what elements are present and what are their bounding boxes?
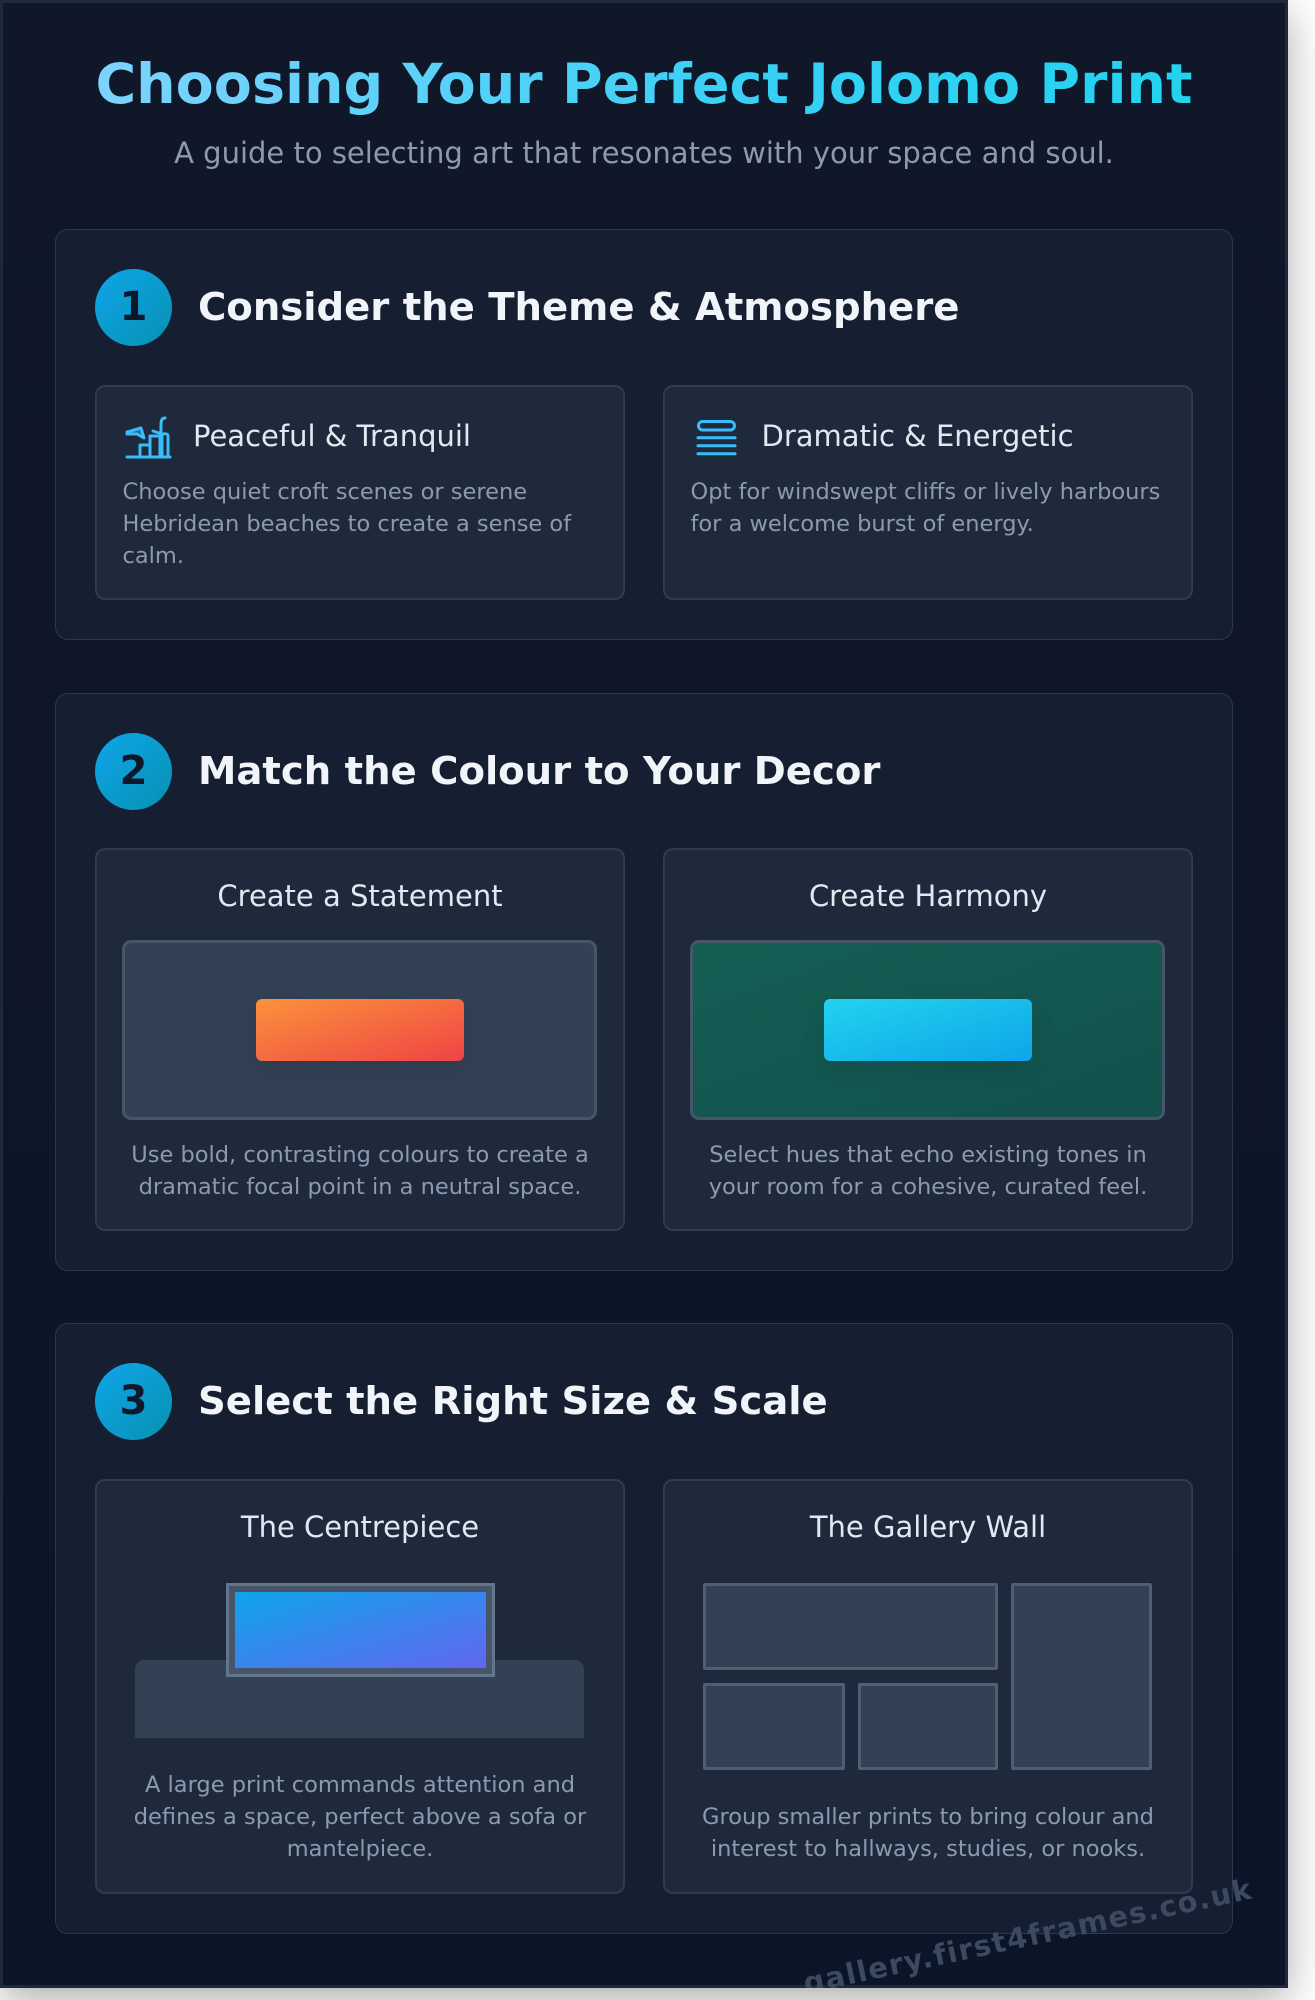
number badge 1: 1 (120, 284, 147, 330)
card: create a statement (95, 848, 625, 1231)
number badge 2 (95, 732, 172, 810)
card text: defines a space, perfect above a sofa or (134, 1804, 586, 1830)
panel: step 2 colour (55, 692, 1233, 1270)
illustration: neutral wall (122, 940, 597, 1120)
card text: mantelpiece. (287, 1836, 433, 1862)
card text: for a welcome burst of energy. (690, 511, 1034, 537)
panel: step 3 size (55, 1323, 1233, 1934)
card text (709, 1142, 1147, 1200)
card title: The Centrepiece (241, 1510, 479, 1544)
subtitle: A guide to selecting art that resonates with your space and soul. (174, 136, 1114, 170)
illustration: print above sofa (135, 1583, 584, 1738)
heading: step 1: Consider the Theme & Atmosphere (198, 285, 959, 330)
number badge 3 (95, 1363, 172, 1440)
card text: calm. (122, 543, 184, 569)
number badge 1 (95, 269, 172, 346)
card title: Dramatic & Energetic (762, 418, 1074, 452)
card text: interest to hallways, studies, or nooks. (711, 1836, 1145, 1862)
card text (690, 479, 1160, 537)
card: create harmony (663, 848, 1193, 1231)
card: dramatic and energetic (663, 385, 1193, 600)
panel: step 1 theme and atmosphere (55, 229, 1233, 640)
card text: your room for a cohesive, curated feel. (709, 1174, 1147, 1200)
card text: Opt for windswept cliffs or lively harbours (690, 479, 1160, 505)
heading: step 3: Select the Right Size & Scale (198, 1379, 828, 1424)
card: the centrepiece (95, 1479, 625, 1894)
illustration: gallery frames (703, 1583, 1152, 1770)
frame: wide (703, 1583, 998, 1670)
card text: Use bold, contrasting colours to create a (131, 1142, 589, 1168)
card text: Hebridean beaches to create a sense of (122, 511, 571, 537)
icon: croft buildings (126, 416, 172, 458)
card title: The Gallery Wall (810, 1510, 1046, 1544)
card text (122, 479, 572, 569)
framed print (226, 1583, 495, 1677)
card text: Choose quiet croft scenes or serene (122, 479, 527, 505)
card: the gallery wall (663, 1479, 1193, 1894)
card text: dramatic focal point in a neutral space. (139, 1174, 581, 1200)
card text: Select hues that echo existing tones in (709, 1142, 1147, 1168)
swatch: cyan print (824, 999, 1032, 1061)
frame: small left (703, 1683, 845, 1770)
card text (131, 1142, 589, 1200)
frame: small right (858, 1683, 998, 1770)
title: Choosing Your Perfect Jolomo Print (95, 52, 1193, 117)
number badge 2: 2 (120, 748, 147, 794)
card text: Group smaller prints to bring colour and (702, 1804, 1154, 1830)
card: peaceful and tranquil (95, 385, 625, 600)
card text (134, 1772, 586, 1862)
card title: Peaceful & Tranquil (193, 418, 471, 452)
frame: tall (1011, 1583, 1152, 1770)
card title: Create a Statement (217, 878, 503, 912)
icon: waves (696, 420, 736, 456)
illustration: teal wall (690, 940, 1165, 1120)
number badge 3: 3 (120, 1378, 147, 1424)
card text: A large print commands attention and (145, 1772, 575, 1798)
swatch: orange print (256, 999, 464, 1061)
card title: Create Harmony (809, 878, 1047, 912)
heading: step 2: Match the Colour to Your Decor (198, 748, 880, 794)
sofa (135, 1660, 584, 1738)
card text (702, 1804, 1154, 1862)
